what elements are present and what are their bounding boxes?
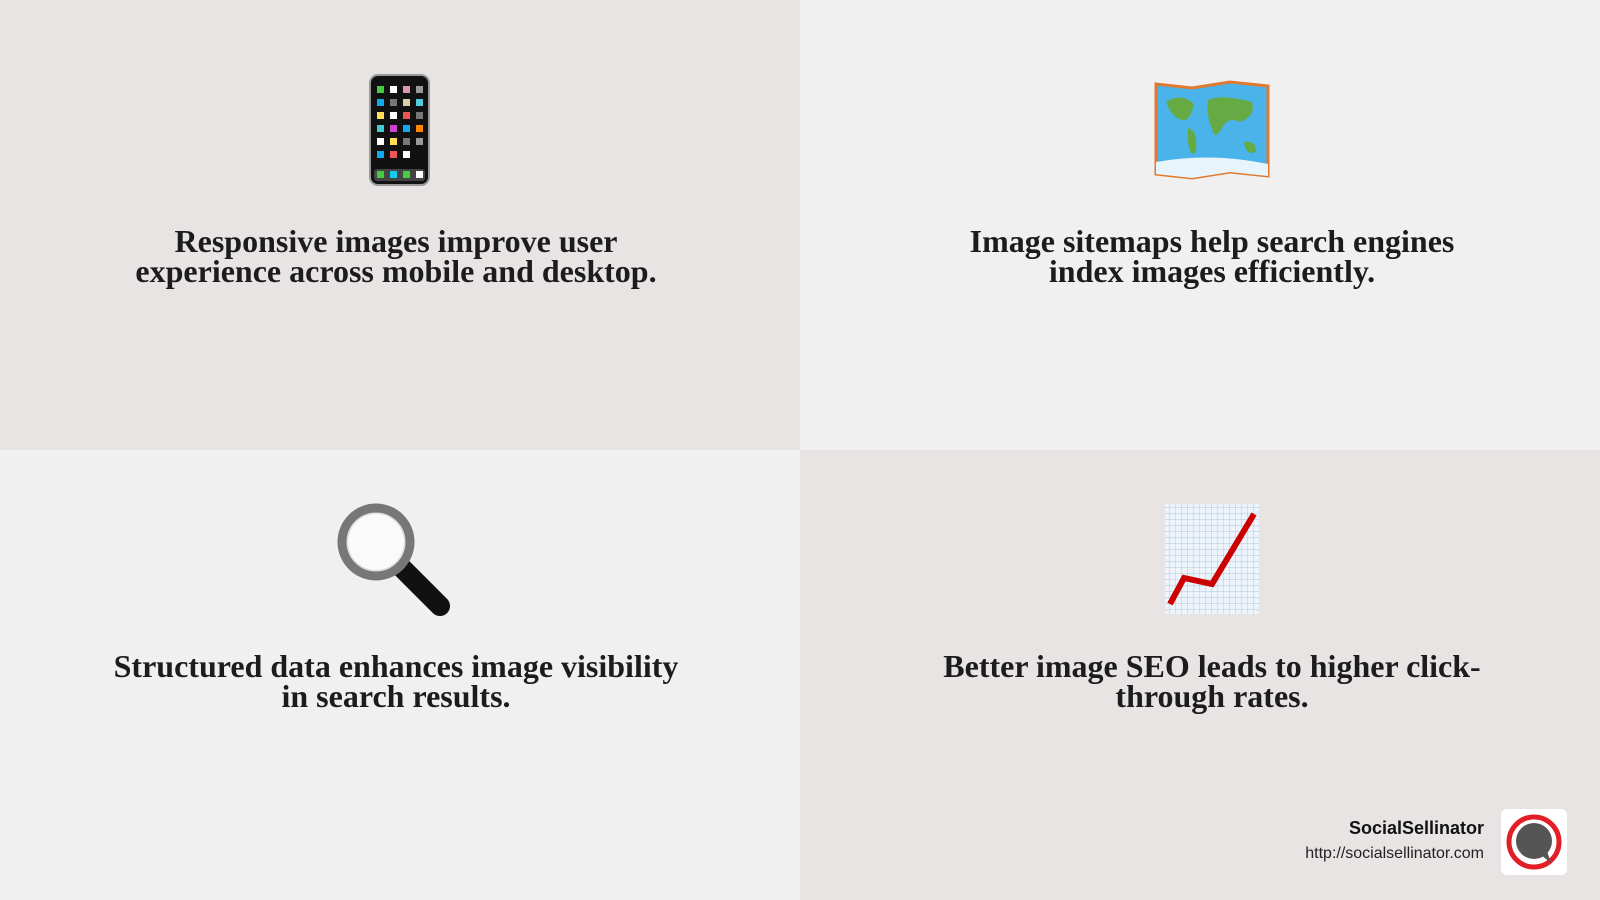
text: structured data: in search results.: [281, 678, 511, 714]
panel: responsive images: [0, 0, 800, 450]
panel: better image SEO: [800, 450, 1600, 900]
panel: image sitemaps: [800, 0, 1600, 450]
text: sitemaps: Image sitemaps help search engines: [970, 223, 1454, 259]
text: responsive: [135, 223, 657, 289]
icon: magnifying glass: [338, 504, 450, 616]
icon: world map: [1154, 80, 1270, 180]
text: SEO: through rates.: [1115, 678, 1309, 714]
text: SEO: [943, 648, 1481, 714]
brand name: SocialSellinator: [1349, 818, 1484, 838]
icon: mobile phone: [369, 74, 430, 186]
text: sitemaps: [970, 223, 1454, 289]
icon: chart increasing: [1165, 504, 1259, 614]
text: sitemaps: index images efficiently.: [1049, 253, 1375, 289]
text: structured data: [114, 648, 678, 714]
text: structured data: Structured data enhances image visibility: [114, 648, 678, 684]
panel: structured data: [0, 450, 800, 900]
brand block: [1305, 809, 1567, 875]
text: responsive: Responsive images improve user: [175, 223, 617, 259]
text: responsive: experience across mobile and desktop.: [135, 253, 657, 289]
brand url: http://socialsellinator.com: [1305, 845, 1484, 862]
text: SEO: Better image SEO leads to higher click-: [943, 648, 1481, 684]
logo: [1501, 809, 1567, 875]
